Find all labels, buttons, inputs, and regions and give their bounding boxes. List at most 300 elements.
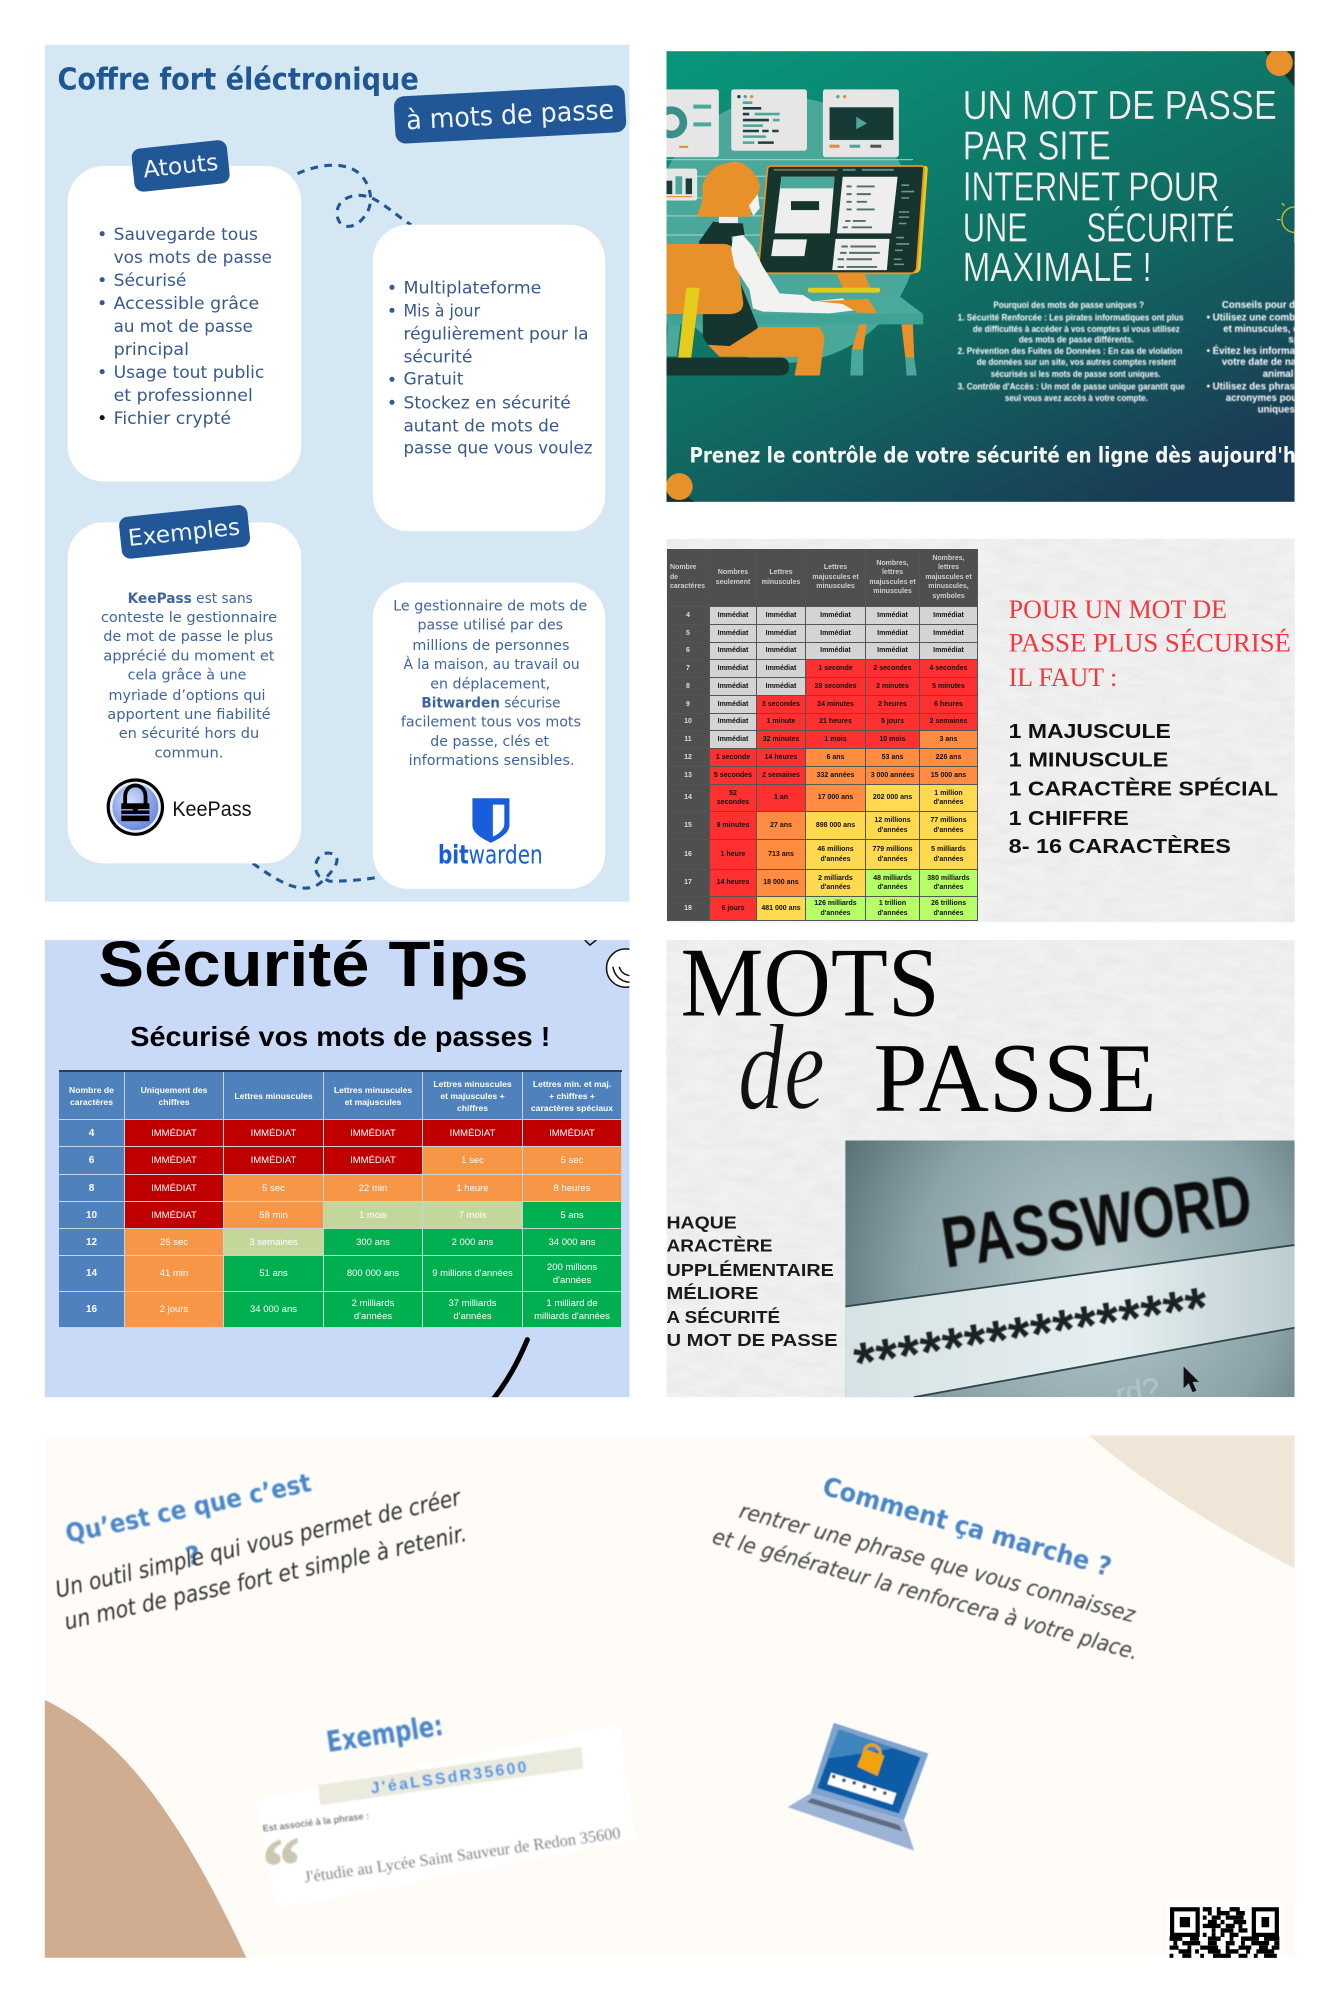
bullet list: atouts suite: Stockez en sécurité (403, 394, 571, 414)
table: temps de piratage (gris/rouge/orange/jaune/vert): 3 ans (940, 736, 957, 743)
table: temps de piratage (gris/rouge/orange/jaune/vert): Immédiat (766, 647, 796, 654)
table: temps de piratage (gris/rouge/orange/jaune/vert): Immédiat (718, 647, 748, 654)
panel: mots de passe (666, 928, 1295, 1412)
text: pourquoi des mots de passe uniques: 1. Sécurité Renforcée : Les pirates informatiques ont plus (958, 313, 1184, 323)
table: temps de piratage (gris/rouge/orange/jaune/vert): 6 heures (934, 701, 963, 708)
pill: à mots de passe (393, 85, 627, 144)
table: temps de piratage (gris/rouge/orange/jaune/vert): 24 minutes (817, 701, 854, 708)
table: sécurité tips (rouge/orange/vert): 200 millions (547, 1262, 597, 1272)
table: sécurité tips (rouge/orange/vert): + chiffres + (549, 1090, 595, 1100)
table: sécurité tips (rouge/orange/vert): IMMÉDIAT (549, 1128, 595, 1138)
table: temps de piratage (gris/rouge/orange/jaune/vert): 10 (684, 718, 692, 725)
title: de: de (738, 1000, 825, 1136)
table: temps de piratage (gris/rouge/orange/jaune/vert): 48 milliards (873, 874, 912, 882)
bullet list: atouts suite: autant de mots de (403, 417, 559, 437)
table: temps de piratage (gris/rouge/orange/jaune/vert): 27 ans (770, 822, 792, 829)
text: keepass: en sécurité hors du (119, 726, 259, 742)
card: bitwarden (373, 582, 605, 889)
table: temps de piratage (gris/rouge/orange/jaune/vert): 5 (686, 630, 690, 637)
bullet list: atouts: vos mots de passe (114, 248, 272, 268)
table: sécurité tips (rouge/orange/vert): et majuscules (345, 1096, 401, 1106)
text: rentrer une phrase: rentrer une phrase que vous connaissez (736, 1499, 1138, 1628)
table: temps de piratage (gris/rouge/orange/jaune/vert): Nombre (670, 564, 696, 571)
decoration: top right circle (1264, 49, 1295, 87)
title: mots: MOTS (681, 928, 940, 1037)
dashed connector: bottom (253, 853, 377, 888)
panel: sécurité tips (45, 928, 645, 1400)
text: keepass: commun. (154, 745, 223, 761)
table: temps de piratage (gris/rouge/orange/jaune/vert): Immédiat (718, 665, 748, 672)
pill: exemples (118, 504, 251, 560)
table: sécurité tips (rouge/orange/vert): 58 min (259, 1210, 288, 1220)
table: temps de piratage (gris/rouge/orange/jaune/vert): 77 millions (930, 817, 967, 824)
text: pourquoi des mots de passe uniques: de données sur un site, vos autres comptes restent (977, 357, 1176, 367)
table: sécurité tips (rouge/orange/vert): IMMÉDIAT (251, 1128, 296, 1138)
text: keepass: cela grâce à une (128, 667, 247, 683)
table: temps de piratage (gris/rouge/orange/jaune/vert): 10 mois (879, 736, 906, 743)
table: sécurité tips (rouge/orange/vert): 2 milliards (352, 1298, 394, 1308)
bullet list: atouts: au mot de passe (114, 317, 253, 337)
pill: atouts (131, 139, 231, 193)
table: temps de piratage (gris/rouge/orange/jaune/vert): Nombres, (932, 555, 965, 562)
table: temps de piratage (gris/rouge/orange/jaune/vert): symboles (932, 593, 965, 600)
text: bitwarden: de passe, clés et (430, 734, 549, 750)
text: bitwarden: Le gestionnaire de mots de (393, 598, 588, 614)
table: temps de piratage (gris/rouge/orange/jaune/vert): 9 minutes (717, 822, 749, 829)
table: temps de piratage (gris/rouge/orange/jaune/vert): 1 trillion (879, 900, 906, 907)
table: temps de piratage (gris/rouge/orange/jaune/vert): 18 000 ans (763, 879, 799, 886)
table: sécurité tips (rouge/orange/vert): Uniquement des (141, 1084, 207, 1094)
table: temps de piratage (gris/rouge/orange/jaune/vert): Immédiat (933, 612, 964, 619)
table: sécurité tips (rouge/orange/vert): IMMÉDIAT (251, 1155, 296, 1166)
text: chaque caractère (666, 1213, 838, 1350)
table: temps de piratage (gris/rouge/orange/jaune/vert): 481 000 ans (761, 905, 801, 912)
table: sécurité tips (rouge/orange/vert): 1 heure (456, 1182, 489, 1194)
table: temps de piratage (gris/rouge/orange/jaune/vert): Immédiat (877, 647, 908, 654)
text: conseils (1206, 300, 1295, 416)
table: temps de piratage (gris/rouge/orange/jaune/vert): d'années (877, 910, 908, 916)
text: bitwarden: À la maison, au travail ou (403, 655, 580, 673)
table: temps de piratage (gris/rouge/orange/jaune/vert): 1 seconde (818, 665, 853, 672)
table: temps de piratage (gris/rouge/orange/jaune/vert): Immédiat (718, 701, 748, 708)
table: temps de piratage (gris/rouge/orange/jaune/vert): seulement (716, 578, 750, 586)
table: temps de piratage (gris/rouge/orange/jaune/vert): 2 semaines (762, 772, 800, 779)
heading: qu'est ce que c'est (66, 1473, 312, 1566)
table: temps de piratage (gris/rouge/orange/jaune/vert): 2 heures (878, 701, 907, 708)
text: pourquoi des mots de passe uniques: 3. Contrôle d'Accès : Un mot de passe unique garantit que (958, 382, 1185, 392)
table: temps de piratage (gris/rouge/orange/jaune/vert): caractères (670, 583, 705, 590)
table: sécurité tips (rouge/orange/vert): caractères spéciaux (531, 1102, 613, 1112)
table: sécurité tips (rouge/orange/vert): d'années (354, 1310, 392, 1322)
monitor (758, 166, 928, 293)
text: bitwarden: en déplacement, (430, 676, 550, 692)
list: critères (1009, 721, 1278, 858)
heading: pour un mot de passe plus sécurisé: PASSE PLUS SÉCURISÉ (1009, 627, 1291, 657)
list: critères: 8- 16 CARACTÈRES (1009, 835, 1231, 858)
table: temps de piratage (gris/rouge/orange/jaune/vert): 17 000 ans (818, 794, 853, 801)
table: temps de piratage (gris/rouge/orange/jaune/vert): 12 (684, 754, 692, 761)
table: temps de piratage (gris/rouge/orange/jaune/vert): 8 (686, 683, 690, 690)
table: sécurité tips (rouge/orange/vert): 1 sec (461, 1155, 484, 1166)
bullet list: atouts: Accessible grâce (114, 294, 259, 314)
table: sécurité tips (rouge/orange/vert): 5 sec (561, 1155, 583, 1166)
table: temps de piratage (gris/rouge/orange/jaune/vert): 332 années (817, 772, 854, 779)
text: keepass: de mot de passe le plus (103, 629, 273, 645)
table: temps de piratage (gris/rouge/orange/jaune/vert): 14 heures (717, 879, 749, 886)
table: temps de piratage (gris/rouge/orange/jaune/vert): 53 ans (882, 754, 903, 761)
table: temps de piratage (gris/rouge/orange/jaune/vert): Immédiat (766, 665, 796, 672)
card: example phrase (262, 1747, 621, 1884)
table: temps de piratage (gris/rouge/orange/jaune/vert): 2 semaines (930, 718, 967, 725)
bullet list: atouts suite: régulièrement pour la (403, 325, 589, 345)
photo: password field: rd? (1113, 1371, 1162, 1412)
card: example phrase: J'éaLSSdR35600 (370, 1759, 528, 1797)
table: temps de piratage (gris/rouge/orange/jaune/vert): Immédiat (766, 612, 796, 619)
table: sécurité tips (rouge/orange/vert): Nombre de (69, 1084, 114, 1094)
desk (666, 294, 923, 375)
table: temps de piratage (gris/rouge/orange/jaune/vert): 898 000 ans (816, 822, 855, 829)
bullet list: atouts suite (389, 279, 592, 458)
title: un mot de passe par site: PAR SITE (963, 123, 1111, 169)
table: temps de piratage (gris/rouge/orange/jaune/vert): Immédiat (718, 736, 748, 743)
heading: pour un mot de passe plus sécurisé: IL FAUT : (1009, 662, 1117, 692)
text: conseils: acronymes pour créer (1226, 393, 1328, 404)
table: sécurité tips (rouge/orange/vert): 8 heures (554, 1182, 590, 1194)
table: sécurité tips (rouge/orange/vert): 34 000 ans (548, 1236, 596, 1248)
text: keepass: apportent une fiabilité (107, 707, 271, 723)
decoration: bottom left circle (666, 473, 695, 502)
bullet list: atouts suite: Mis à jour (403, 302, 481, 322)
decoration: swirl (584, 940, 630, 988)
table: temps de piratage (gris/rouge/orange/jaune/vert): 11 (684, 736, 692, 743)
text: chaque caractère: U MOT DE PASSE (666, 1330, 838, 1350)
bullet list: atouts suite: passe que vous voulez (403, 438, 592, 458)
title: un mot de passe par site: INTERNET POUR (963, 164, 1219, 210)
text: chaque caractère: ARACTÈRE (666, 1235, 773, 1256)
table: sécurité tips (rouge/orange/vert): 16 (86, 1304, 97, 1315)
table: temps de piratage (gris/rouge/orange/jaune/vert): 32 minutes (763, 736, 799, 743)
table: temps de piratage (gris/rouge/orange/jaune/vert): 2 milliards (818, 874, 853, 882)
list: critères: 1 MAJUSCULE (1009, 721, 1171, 743)
text: pourquoi des mots de passe uniques: sécurisés si les mots de passe sont uniques. (991, 369, 1161, 379)
table: temps de piratage (gris/rouge/orange/jaune/vert): 9 (686, 701, 690, 708)
table: sécurité tips (rouge/orange/vert): 25 sec (160, 1236, 188, 1248)
table: temps de piratage (gris/rouge/orange/jaune/vert): 1 heure (721, 851, 745, 858)
table: sécurité tips (rouge/orange/vert): 300 ans (356, 1236, 390, 1248)
pill: exemples: Exemples (127, 514, 241, 552)
bullet list: atouts suite: sécurité (403, 348, 472, 368)
table: temps de piratage (gris/rouge/orange/jaune/vert): 17 (684, 879, 692, 886)
title: un mot de passe par site: UNE (963, 204, 1028, 250)
table: sécurité tips (rouge/orange/vert): 9 millions d'années (432, 1268, 513, 1279)
table: temps de piratage (gris/rouge/orange/jaune/vert): Immédiat (877, 612, 908, 619)
text: bitwarden: Bitwarden sécurise (421, 696, 561, 712)
table: temps de piratage (gris/rouge/orange/jaune/vert): 126 milliards (814, 900, 857, 907)
card: atouts suite (373, 225, 605, 531)
decoration: curved line (493, 1340, 527, 1400)
table: temps de piratage (gris/rouge/orange/jaune/vert): majuscules et (925, 574, 972, 581)
card: example phrase: Est associé à la phrase : (262, 1811, 370, 1835)
table: temps de piratage (gris/rouge/orange/jaune/vert): 2 minutes (876, 683, 909, 690)
card: example phrase: J'étudie au Lycée Saint Sauveur de Redon 35600 (303, 1823, 622, 1886)
table: sécurité tips (rouge/orange/vert): IMMÉDIAT (151, 1182, 197, 1194)
bullet list: atouts: Sécurisé (114, 271, 186, 291)
table: temps de piratage (gris/rouge/orange/jaune/vert): Immédiat (718, 630, 748, 637)
table: sécurité tips (rouge/orange/vert): IMMÉDIAT (350, 1128, 396, 1138)
table: temps de piratage (gris/rouge/orange/jaune/vert): Immédiat (766, 630, 796, 637)
table: temps de piratage (gris/rouge/orange/jaune/vert): majuscules et (812, 574, 859, 581)
table: sécurité tips (rouge/orange/vert): 8 (89, 1182, 94, 1194)
table: temps de piratage (gris/rouge/orange/jaune/vert): Immédiat (933, 647, 964, 654)
bullet list: atouts suite: Multiplateforme (403, 279, 541, 299)
table: sécurité tips (rouge/orange/vert): Lettres minuscules (334, 1084, 412, 1094)
table: sécurité tips (rouge/orange/vert): 2 000 ans (452, 1236, 493, 1248)
table: sécurité tips (rouge/orange/vert): d'années (553, 1274, 591, 1286)
table: sécurité tips (rouge/orange/vert): 22 min (359, 1182, 387, 1194)
table: temps de piratage (gris/rouge/orange/jaune/vert): 1 an (774, 794, 788, 801)
illustration: person at computer (652, 89, 928, 375)
table: sécurité tips (rouge/orange/vert): 37 milliards (448, 1298, 497, 1308)
text: conseils: animal de (1263, 369, 1308, 380)
table: temps de piratage (gris/rouge/orange/jaune/vert): d'années (933, 799, 964, 806)
table: temps de piratage (gris/rouge/orange/jaune/vert): 2 secondes (873, 665, 912, 672)
table: temps de piratage (gris/rouge/orange/jaune/vert): 15 000 ans (931, 772, 966, 779)
photo: password field (845, 1140, 1295, 1412)
table: sécurité tips (rouge/orange/vert): 41 min (160, 1268, 188, 1279)
table: sécurité tips (rouge/orange/vert): IMMÉDIAT (350, 1155, 396, 1166)
table: temps de piratage (gris/rouge/orange/jaune/vert): d'années (933, 826, 964, 834)
table: sécurité tips (rouge/orange/vert): 4 (89, 1128, 94, 1138)
list: critères: 1 CHIFFRE (1009, 808, 1129, 830)
title: passe: PASSE (873, 1024, 1157, 1133)
table: sécurité tips (rouge/orange/vert): 6 (89, 1155, 94, 1166)
table: temps de piratage (gris/rouge/orange/jaune/vert): 21 heures (819, 718, 852, 725)
panel: tableau et conseils (666, 539, 1295, 922)
text: chaque caractère: MÉLIORE (666, 1282, 759, 1303)
text: pourquoi des mots de passe uniques: de difficultés à accéder à vos comptes si vous utilisez (973, 324, 1180, 334)
card: mini chart (666, 168, 698, 200)
shape: tan corner (45, 1700, 246, 1958)
table: temps de piratage (gris/rouge/orange/jaune/vert): 15 (684, 822, 692, 829)
table: temps de piratage (gris/rouge/orange/jaune/vert): 1 mois (824, 736, 847, 743)
table: temps de piratage (gris/rouge/orange/jaune/vert): 14 (684, 794, 692, 801)
text: rentrer une phrase: et le générateur la renforcera à votre place. (710, 1524, 1141, 1666)
table: sécurité tips (rouge/orange/vert): 14 (86, 1268, 97, 1279)
table: temps de piratage (gris/rouge/orange/jaune/vert): 14 heures (765, 754, 797, 761)
table: sécurité tips (rouge/orange/vert): Lettres minuscules (433, 1078, 512, 1088)
table: temps de piratage (gris/rouge/orange/jaune/vert): 6 jours (722, 905, 744, 912)
table: sécurité tips (rouge/orange/vert): caractères (70, 1096, 113, 1106)
table: temps de piratage (gris/rouge/orange/jaune/vert): d'années (820, 856, 851, 862)
table: temps de piratage (gris/rouge/orange/jaune/vert): 1 seconde (716, 754, 750, 761)
text: pourquoi des mots de passe uniques: 2. Prévention des Fuites de Données : En cas de violation (958, 346, 1183, 356)
table: sécurité tips (rouge/orange/vert): 1 mois (359, 1210, 387, 1220)
icon: keepass logo (107, 778, 164, 836)
heading: pour un mot de passe plus sécurisé: POUR UN MOT DE (1009, 594, 1227, 624)
text: conseils: spéciaux (1288, 334, 1330, 345)
bullet list: atouts: et professionnel (114, 386, 253, 406)
bullet list: atouts: principal (114, 340, 189, 360)
text: keepass (101, 591, 277, 761)
table: temps de piratage (gris/rouge/orange/jaune/vert) (667, 549, 978, 921)
text: keepass: apprécié du moment et (103, 648, 275, 664)
pill: atouts: Atouts (142, 150, 220, 183)
table: temps de piratage (gris/rouge/orange/jaune/vert): 16 (684, 851, 692, 858)
bullet list: atouts: Usage tout public (114, 363, 264, 383)
table: sécurité tips (rouge/orange/vert): 10 (86, 1210, 97, 1220)
icon: laptop with lock (788, 1723, 928, 1851)
text: bitwarden: facilement tous vos mots (401, 715, 581, 731)
person (658, 162, 877, 375)
photo: password field: **************** (850, 1275, 1213, 1395)
table: temps de piratage (gris/rouge/orange/jaune/vert): 3 secondes (762, 701, 800, 708)
subtitle: Sécurisé vos mots de passes ! (130, 1021, 550, 1052)
text: chaque caractère: HAQUE (666, 1213, 737, 1233)
bullet list: atouts (100, 225, 272, 429)
table: temps de piratage (gris/rouge/orange/jaune/vert): d'années (820, 910, 851, 916)
table: temps de piratage (gris/rouge/orange/jaune/vert): Immédiat (820, 630, 851, 637)
table: temps de piratage (gris/rouge/orange/jaune/vert): d'années (877, 856, 908, 862)
table: sécurité tips (rouge/orange/vert): IMMÉDIAT (151, 1210, 197, 1220)
shape: beige corner (1089, 1436, 1295, 1568)
table: temps de piratage (gris/rouge/orange/jaune/vert): 46 millions (817, 846, 854, 853)
text: bitwarden: passe utilisé par des (418, 618, 563, 634)
table: temps de piratage (gris/rouge/orange/jaune/vert): minuscules, (928, 583, 969, 590)
title: un mot de passe par site: MAXIMALE ! (963, 244, 1152, 290)
card: atouts (68, 139, 301, 481)
table: sécurité tips (rouge/orange/vert): et majuscules + (440, 1090, 505, 1100)
table: sécurité tips (rouge/orange/vert): milliards d'années (534, 1310, 610, 1322)
table: temps de piratage (gris/rouge/orange/jaune/vert): 3 000 années (871, 772, 914, 779)
table: sécurité tips (rouge/orange/vert): Lettres min. et maj. (533, 1078, 611, 1088)
table: sécurité tips (rouge/orange/vert): 12 (86, 1236, 97, 1248)
text: un outil simple: un mot de passe fort et simple à retenir. (62, 1521, 469, 1635)
table: temps de piratage (gris/rouge/orange/jaune/vert): 380 milliards (927, 874, 970, 882)
table: temps de piratage (gris/rouge/orange/jaune/vert): de (670, 574, 678, 581)
table: temps de piratage (gris/rouge/orange/jaune/vert): Immédiat (766, 683, 796, 690)
table: temps de piratage (gris/rouge/orange/jaune/vert): 5 minutes (932, 683, 965, 690)
title: sécurité tips: Sécurité Tips (98, 928, 529, 1000)
table: temps de piratage (gris/rouge/orange/jaune/vert): 779 millions (872, 846, 913, 853)
card: settings (666, 89, 719, 158)
table: sécurité tips (rouge/orange/vert): 51 ans (259, 1268, 288, 1279)
table: temps de piratage (gris/rouge/orange/jaune/vert): Nombres, (876, 560, 909, 566)
table: sécurité tips (rouge/orange/vert): chiffres (457, 1102, 488, 1112)
table: sécurité tips (rouge/orange/vert): 3 semaines (249, 1236, 298, 1248)
text: conseils: uniques et (1258, 405, 1307, 416)
table: sécurité tips (rouge/orange/vert): IMMÉDIAT (151, 1155, 197, 1166)
title: un mot de passe par site: UN MOT DE PASSE (963, 82, 1277, 128)
text: pourquoi des mots de passe uniques: seul vous avez accès à votre compte. (1005, 393, 1148, 403)
card: exemples keepass (68, 504, 301, 863)
table: sécurité tips (rouge/orange/vert): IMMÉDIAT (151, 1128, 197, 1138)
title: un mot de passe par site (963, 82, 1277, 290)
pill: à mots de passe: à mots de passe (405, 94, 615, 136)
table: temps de piratage (gris/rouge/orange/jaune/vert): 4 (686, 612, 690, 619)
bullet list: atouts: Sauvegarde tous (114, 225, 258, 245)
table: temps de piratage (gris/rouge/orange/jaune/vert): 18 (684, 905, 692, 912)
text: pourquoi des mots de passe uniques: Pourquoi des mots de passe uniques ? (993, 300, 1144, 310)
table: sécurité tips (rouge/orange/vert): d'années (453, 1310, 492, 1322)
panel: coffre fort électronique (45, 45, 629, 902)
table: temps de piratage (gris/rouge/orange/jaune/vert): d'années (877, 826, 908, 834)
table: temps de piratage (gris/rouge/orange/jaune/vert): 4 secondes (929, 665, 968, 672)
table: temps de piratage (gris/rouge/orange/jaune/vert): Lettres (769, 569, 793, 576)
table: temps de piratage (gris/rouge/orange/jaune/vert): lettres (882, 569, 903, 576)
table: temps de piratage (gris/rouge/orange/jaune/vert): 5 secondes (714, 772, 752, 779)
heading: comment ça marche: Comment ça marche ? (819, 1472, 1115, 1583)
table: temps de piratage (gris/rouge/orange/jaune/vert): majuscules et (869, 578, 916, 586)
list: critères: 1 CARACTÈRE SPÉCIAL (1009, 778, 1278, 801)
heading: exemple: Exemple: (324, 1709, 445, 1759)
table: temps de piratage (gris/rouge/orange/jaune/vert): lettres (938, 564, 959, 571)
table: temps de piratage (gris/rouge/orange/jaune/vert): Immédiat (718, 683, 748, 690)
table: sécurité tips (rouge/orange/vert): 800 000 ans (347, 1268, 399, 1279)
table: temps de piratage (gris/rouge/orange/jaune/vert): 1 million (934, 790, 963, 796)
icon: bitwarden shield (472, 798, 509, 843)
text: un outil simple: Un outil simple qui vous permet de créer (53, 1485, 464, 1604)
text: chaque caractère: A SÉCURITÉ (666, 1306, 780, 1327)
list: critères: 1 MINUSCULE (1009, 749, 1168, 771)
text: bitwarden (393, 598, 588, 769)
table: sécurité tips (rouge/orange/vert): IMMÉDIAT (450, 1128, 495, 1138)
bullet list: atouts: Fichier crypté (114, 409, 231, 429)
panel: un mot de passe par site (652, 49, 1333, 502)
table: sécurité tips (rouge/orange/vert): 7 mois (458, 1210, 486, 1220)
text: bitwarden: informations sensibles. (409, 753, 575, 769)
bullet list: atouts suite: Gratuit (403, 369, 464, 389)
table: temps de piratage (gris/rouge/orange/jaune/vert): d'années (933, 856, 964, 862)
icon: bulb (1276, 202, 1295, 243)
table: sécurité tips (rouge/orange/vert): 5 sec (262, 1182, 285, 1194)
card: video (823, 89, 899, 157)
label: bitwarden: bitwarden (438, 840, 543, 870)
table: temps de piratage (gris/rouge/orange/jaune/vert): 226 ans (936, 754, 961, 761)
text: conseils: votre date de naissance (1222, 357, 1332, 368)
table: temps de piratage (gris/rouge/orange/jaune/vert): Lettres (824, 564, 847, 571)
table: temps de piratage (gris/rouge/orange/jaune/vert): Immédiat (820, 647, 851, 654)
table: temps de piratage (gris/rouge/orange/jaune/vert): Nombres (718, 569, 748, 576)
table: sécurité tips (rouge/orange/vert): 1 milliard de (546, 1298, 598, 1308)
table: temps de piratage (gris/rouge/orange/jaune/vert): Immédiat (877, 630, 908, 637)
heading: qu'est ce que c'est: ? (183, 1540, 204, 1573)
table: temps de piratage (gris/rouge/orange/jaune/vert): d'années (820, 884, 851, 891)
dashed connector: top (297, 165, 411, 226)
text: chaque caractère: UPPLÉMENTAIRE (666, 1259, 834, 1280)
table: temps de piratage (gris/rouge/orange/jaune/vert): d'années (933, 910, 964, 916)
table: temps de piratage (gris/rouge/orange/jaune/vert): 6 ans (827, 754, 844, 761)
table: sécurité tips (rouge/orange/vert): chiffres (158, 1096, 190, 1106)
table: temps de piratage (gris/rouge/orange/jaune/vert): 7 (686, 665, 690, 672)
table: temps de piratage (gris/rouge/orange/jaune/vert): 5 milliards (931, 846, 966, 853)
panel: générateur de mots de passe (45, 1436, 1295, 1958)
table: temps de piratage (gris/rouge/orange/jaune/vert): 12 millions (874, 817, 911, 824)
table: temps de piratage (gris/rouge/orange/jaune/vert): secondes (717, 799, 749, 806)
table: temps de piratage (gris/rouge/orange/jaune/vert): 52 (729, 790, 737, 796)
text: pourquoi des mots de passe uniques: des mots de passe différents. (1019, 334, 1134, 344)
table: sécurité tips (rouge/orange/vert): 2 jours (160, 1304, 188, 1315)
table: temps de piratage (gris/rouge/orange/jaune/vert): minuscules (816, 583, 855, 590)
table: temps de piratage (gris/rouge/orange/jaune/vert): 5 jours (881, 718, 904, 725)
text: keepass: conteste le gestionnaire (101, 610, 277, 626)
card: code list (731, 89, 807, 151)
table: temps de piratage (gris/rouge/orange/jaune/vert): Immédiat (933, 630, 964, 637)
table: sécurité tips (rouge/orange/vert): 5 ans (560, 1210, 584, 1220)
table: temps de piratage (gris/rouge/orange/jaune/vert): 6 (686, 647, 690, 654)
table: temps de piratage (gris/rouge/orange/jaune/vert): 1 minute (767, 718, 795, 725)
table: temps de piratage (gris/rouge/orange/jaune/vert): 26 trillions (931, 900, 966, 907)
text: keepass: KeePass est sans (128, 591, 253, 607)
